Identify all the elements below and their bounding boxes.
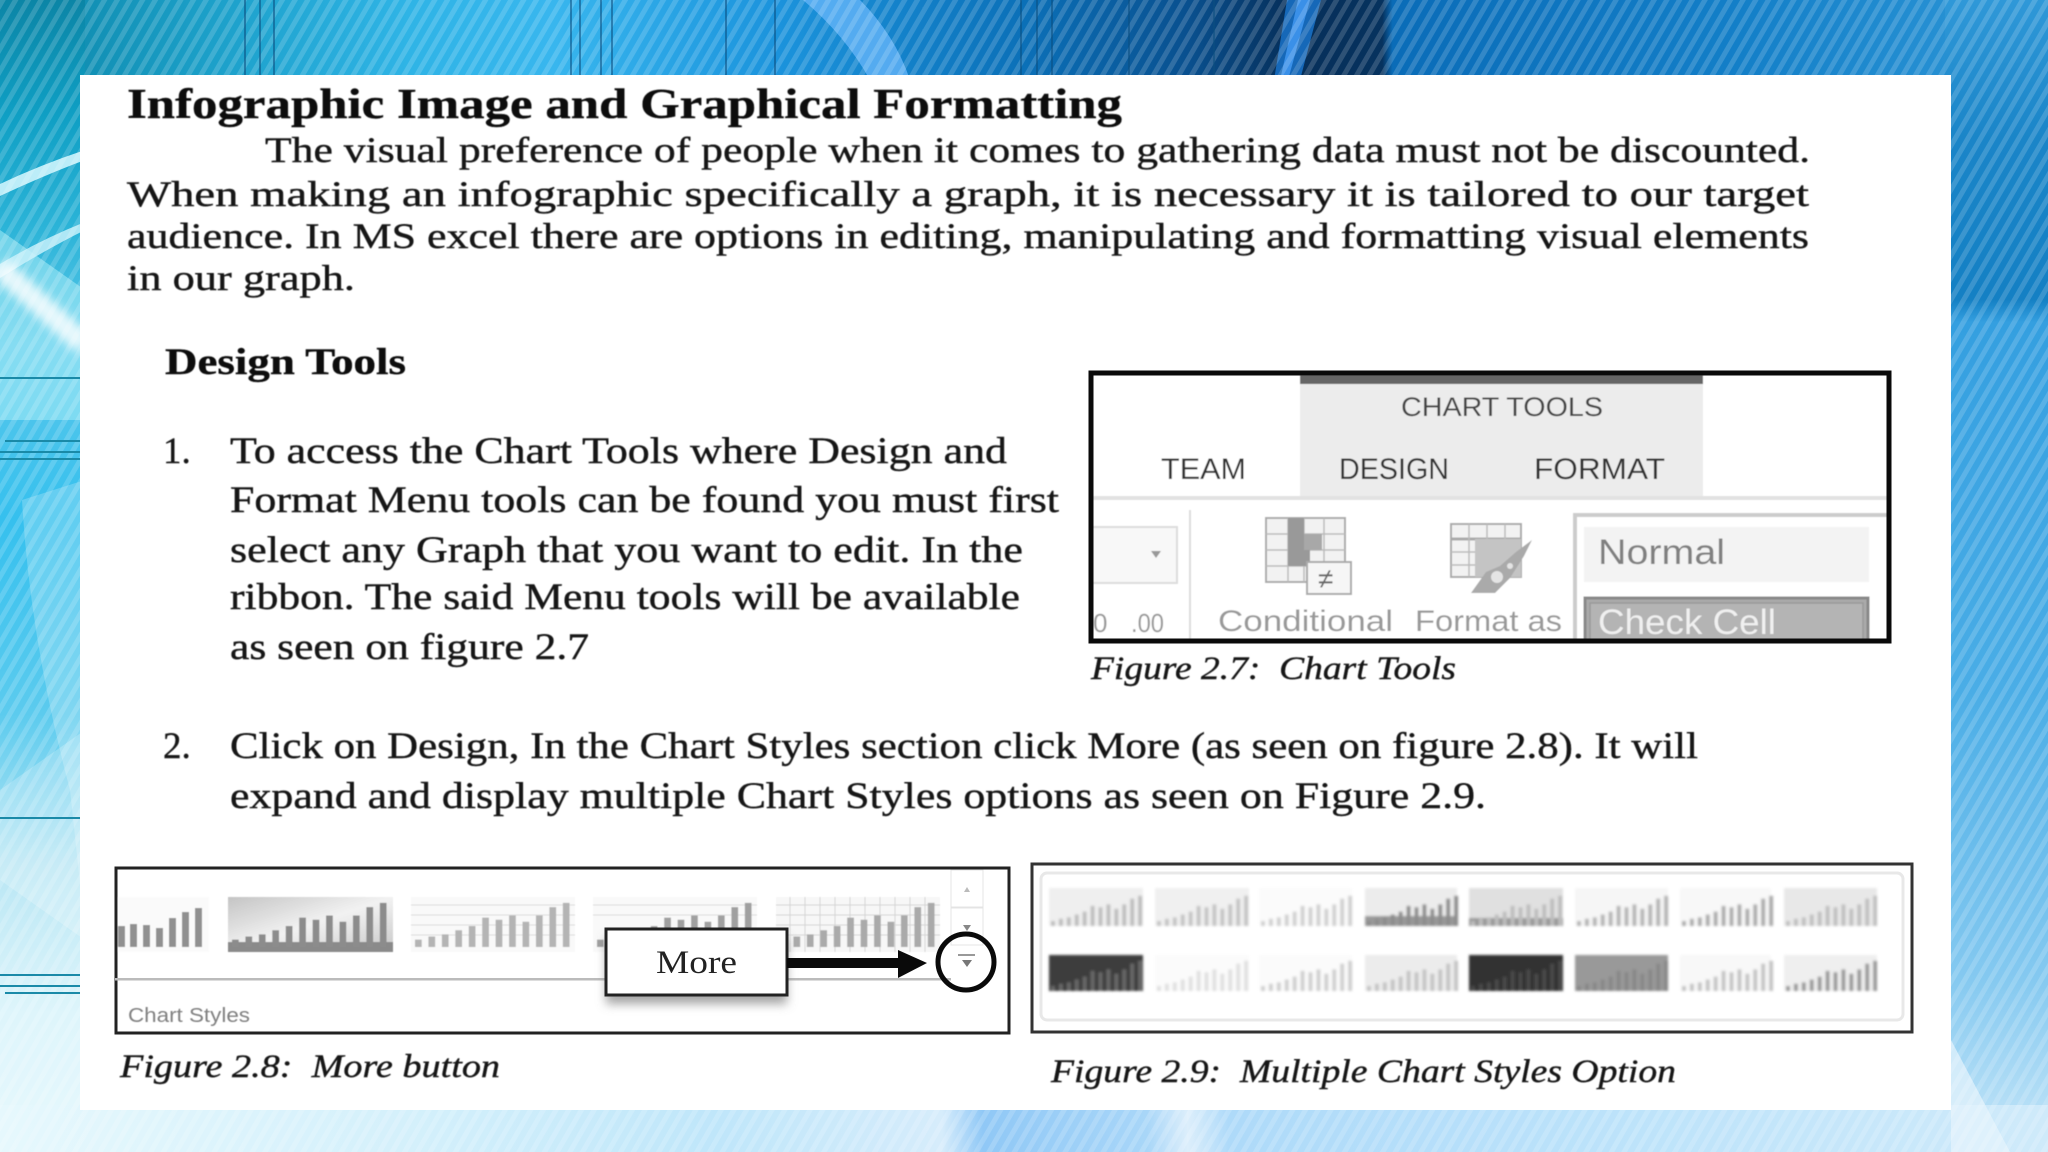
chart styles label: Chart Styles [128, 1005, 250, 1027]
figure 2.8: chart styles ribbon [115, 868, 1009, 1033]
callout shadow [606, 938, 787, 1004]
scroll buttons [951, 870, 983, 945]
arrow to more button [787, 950, 927, 978]
icon: format as table [1451, 524, 1532, 593]
figure 2.7: chart tools ribbon [1091, 373, 1889, 642]
step 2: 2. [163, 726, 191, 767]
callout: more [606, 929, 787, 995]
step 1: Format Menu tools can be found you must first [230, 480, 1060, 521]
intro paragraph: audience. In MS excel there are options in editing, manipulating and formatting visual elements [127, 216, 1809, 256]
icon: conditional formatting: ≠ [1318, 563, 1333, 594]
step 1: ribbon. The said Menu tools will be available [230, 577, 1020, 618]
step 2: expand and display multiple Chart Styles options as seen on Figure 2.9. [230, 776, 1486, 817]
icon: more button circled [938, 934, 994, 990]
step 1 [163, 431, 1060, 668]
figure 2.7 border [1091, 373, 1889, 641]
intro paragraph [127, 130, 1810, 298]
chart style thumbnails [118, 897, 940, 952]
step 1: To access the Chart Tools where Design and [230, 431, 1008, 472]
title: Infographic Image and Graphical Formatting [127, 82, 1122, 128]
intro paragraph: in our graph. [127, 258, 355, 298]
step 2: Click on Design, In the Chart Styles section click More (as seen on figure 2.8). It will [230, 726, 1698, 767]
chart tools tab group [1300, 375, 1703, 497]
format as label: Format as [1415, 605, 1562, 638]
team tab: TEAM [1161, 453, 1246, 486]
chart tools tab group: DESIGN [1339, 453, 1449, 486]
text content [119, 82, 1810, 1090]
icon: conditional formatting [1266, 518, 1351, 594]
conditional label: Conditional [1218, 605, 1393, 638]
caption figure 2.9: Figure 2.9: Multiple Chart Styles Option [1050, 1054, 1676, 1090]
step 1: 1. [163, 431, 191, 472]
cell styles gallery: Normal [1598, 533, 1725, 572]
step 1: select any Graph that you want to edit. In the [230, 530, 1023, 571]
heading: design tools: Design Tools [165, 342, 406, 383]
intro paragraph: When making an infographic specifically a graph, it is necessary it is tailored to our target [127, 174, 1809, 214]
number format dropdown [1091, 527, 1177, 638]
figure 2.9: multiple chart styles [1032, 864, 1912, 1032]
step 2 [163, 726, 1698, 817]
caption figure 2.8: Figure 2.8: More button [119, 1049, 500, 1085]
cell styles gallery: Check Cell [1598, 603, 1776, 642]
step 1: as seen on figure 2.7 [230, 627, 589, 668]
style thumbnails grid [1049, 888, 1877, 991]
caption figure 2.7: Figure 2.7: Chart Tools [1090, 651, 1456, 687]
number format dropdown: .00 [1131, 608, 1164, 638]
chart tools tab group: FORMAT [1534, 453, 1665, 486]
intro paragraph: The visual preference of people when it comes to gathering data must not be discounted. [265, 130, 1810, 170]
callout: more: More [656, 945, 737, 981]
number format dropdown: 0 [1093, 608, 1107, 638]
cell styles gallery [1575, 515, 1889, 642]
chart tools tab group: CHART TOOLS [1401, 392, 1603, 422]
